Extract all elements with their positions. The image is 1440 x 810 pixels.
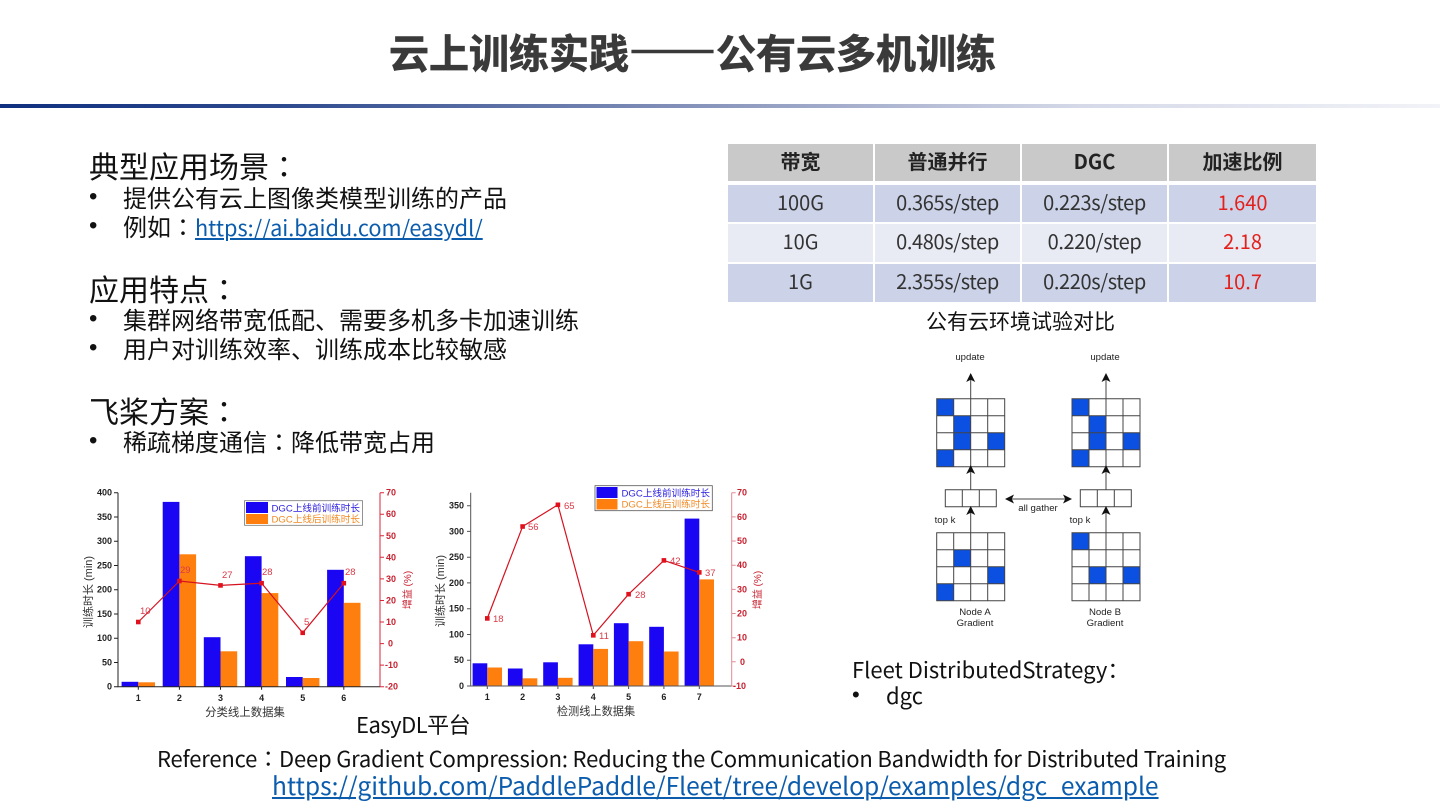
left axis labels: 250 bbox=[97, 560, 112, 570]
row 1G: 10.7 bbox=[1223, 266, 1262, 295]
gain line: 29 bbox=[180, 565, 191, 576]
right axis labels: 40 bbox=[737, 560, 747, 570]
axis titles: 增益 (%) bbox=[401, 571, 414, 609]
reference line: Reference：Deep Gradient Compression: Reducing the Communication Bandwidth for Distributed Training bbox=[157, 742, 1226, 774]
bullet: dgc: dgc bbox=[886, 679, 923, 711]
gain line: 28 bbox=[262, 567, 273, 578]
gain line: 28 bbox=[635, 590, 646, 601]
row 1G: 2.355s/step bbox=[896, 266, 999, 295]
arrows bbox=[971, 374, 1106, 533]
diagram labels: top k bbox=[1070, 515, 1091, 526]
header row bbox=[728, 144, 1316, 181]
gain line: 18 bbox=[493, 614, 504, 625]
left axis labels: 350 bbox=[97, 512, 112, 522]
chart: classification datasets bbox=[81, 488, 414, 719]
axis titles: 增益 (%) bbox=[751, 571, 764, 609]
header row: 带宽 bbox=[780, 146, 820, 174]
heading: features: 应用特点： bbox=[89, 266, 239, 310]
text block: application features: • bbox=[89, 305, 97, 332]
bullet: bandwidth: 集群网络带宽低配、需要多机多卡加速训练 bbox=[123, 301, 579, 336]
x axis labels: 4 bbox=[591, 692, 596, 702]
bars: before and after bbox=[122, 502, 360, 687]
left axis labels: 200 bbox=[449, 578, 464, 588]
axes bbox=[467, 493, 736, 689]
bars: before and after bbox=[473, 519, 714, 686]
x axis labels: 1 bbox=[136, 693, 141, 703]
axis titles: 训练时长 (min) bbox=[81, 556, 95, 628]
left axis labels: 250 bbox=[449, 552, 464, 562]
left axis labels: 350 bbox=[449, 501, 464, 511]
diagram labels: Node B bbox=[1089, 607, 1121, 618]
row 1G: 1G bbox=[788, 266, 813, 295]
left axis labels: 100 bbox=[449, 630, 464, 640]
legend bbox=[244, 501, 362, 526]
axis titles: 分类线上数据集 bbox=[205, 705, 285, 719]
legend: DGC上线前训练时长 bbox=[272, 502, 360, 514]
right axis labels: 50 bbox=[386, 531, 396, 541]
right axis labels: 50 bbox=[737, 536, 747, 546]
x axis labels: 7 bbox=[697, 692, 702, 702]
right axis labels: 20 bbox=[386, 596, 396, 606]
right axis labels: 10 bbox=[386, 617, 396, 627]
text block: application features: • bbox=[89, 334, 97, 361]
diagram labels: top k bbox=[935, 515, 956, 526]
left axis labels: 100 bbox=[97, 633, 112, 643]
chart caption: EasyDL平台 bbox=[356, 708, 470, 740]
x axis labels: 6 bbox=[661, 692, 666, 702]
row 1G: 0.220s/step bbox=[1043, 266, 1146, 295]
gain line bbox=[136, 565, 356, 635]
fleet heading: Fleet DistributedStrategy： bbox=[852, 653, 1129, 685]
row 10G: 0.220/step bbox=[1048, 226, 1141, 255]
x axis labels bbox=[485, 692, 702, 702]
gain line bbox=[485, 501, 716, 642]
text block: typical scenarios: • bbox=[89, 212, 97, 239]
left axis labels: 200 bbox=[97, 585, 112, 595]
axis titles bbox=[433, 555, 764, 718]
x axis labels: 6 bbox=[341, 693, 346, 703]
row 100G: 1.640 bbox=[1218, 186, 1267, 216]
gain line: 10 bbox=[140, 606, 151, 617]
row 10G bbox=[728, 224, 1316, 262]
right axis labels bbox=[385, 488, 398, 692]
diagram labels: update bbox=[1090, 352, 1120, 363]
node A gradient grid bbox=[937, 533, 1005, 601]
right axis labels: 0 bbox=[388, 639, 393, 649]
text block: paddle solution bbox=[89, 388, 435, 458]
right axis labels: 30 bbox=[386, 574, 396, 584]
right axis labels: -10 bbox=[733, 681, 746, 691]
bullet: product: 提供公有云上图像类模型训练的产品 bbox=[123, 179, 507, 214]
gain line: 11 bbox=[599, 631, 609, 642]
text block: application features bbox=[89, 266, 579, 365]
reference link: https://github.com/PaddlePaddle/Fleet/tree/develop/examples/dgc_example bbox=[272, 768, 1159, 803]
right axis labels: 70 bbox=[386, 488, 396, 498]
right axis labels: 60 bbox=[386, 509, 396, 519]
bullet: example link: 例如：https://ai.baidu.com/easydl/ bbox=[123, 208, 483, 243]
left axis labels: 0 bbox=[107, 682, 112, 692]
legend: DGC上线后训练时长 bbox=[622, 498, 710, 510]
diagram labels: Node A bbox=[959, 607, 991, 618]
axis titles: 检测线上数据集 bbox=[557, 704, 635, 718]
left axis labels: 50 bbox=[454, 655, 464, 665]
left axis labels: 300 bbox=[97, 536, 112, 546]
right axis labels: 10 bbox=[737, 633, 747, 643]
x axis labels: 1 bbox=[485, 692, 490, 702]
x axis labels: 3 bbox=[555, 692, 560, 702]
right axis labels: 20 bbox=[737, 608, 747, 618]
right axis labels: 0 bbox=[740, 657, 745, 667]
fleet strategy text bbox=[852, 653, 1129, 711]
right axis labels: -10 bbox=[385, 660, 398, 670]
right axis labels: 40 bbox=[386, 552, 396, 562]
axis titles: 训练时长 (min) bbox=[433, 555, 447, 627]
node A top-k vector bbox=[945, 490, 996, 507]
left axis labels: 0 bbox=[459, 681, 464, 691]
comparison table bbox=[728, 144, 1316, 302]
gain line: 42 bbox=[670, 556, 681, 567]
node A updated grid bbox=[937, 399, 1005, 467]
left axis labels bbox=[449, 501, 464, 691]
header row: 加速比例 bbox=[1202, 146, 1282, 174]
gain line: 56 bbox=[528, 522, 539, 533]
left axis labels: 400 bbox=[97, 488, 112, 498]
diagram labels bbox=[935, 352, 1124, 629]
title: 云上训练实践——公有云多机训练 bbox=[389, 18, 996, 81]
text block: typical scenarios bbox=[89, 143, 507, 243]
left axis labels bbox=[97, 488, 112, 692]
x axis labels bbox=[136, 693, 346, 703]
gain line: 5 bbox=[304, 617, 309, 628]
right axis labels bbox=[733, 488, 747, 691]
heading: solution: 飞桨方案： bbox=[89, 388, 239, 432]
diagram labels: Gradient bbox=[1087, 618, 1124, 629]
x axis labels: 4 bbox=[259, 693, 264, 703]
row 1G bbox=[728, 264, 1316, 302]
left axis labels: 150 bbox=[449, 604, 464, 614]
x axis labels: 3 bbox=[218, 693, 223, 703]
node B top-k vector bbox=[1080, 490, 1131, 507]
x axis labels: 5 bbox=[626, 692, 631, 702]
fleet strategy text: • bbox=[852, 682, 860, 707]
header row: DGC bbox=[1074, 146, 1115, 174]
row 100G bbox=[728, 185, 1316, 222]
legend bbox=[595, 486, 712, 511]
diagram labels: Gradient bbox=[957, 618, 994, 629]
gain line: 28 bbox=[345, 567, 356, 578]
table caption: 公有云环境试验对比 bbox=[926, 306, 1115, 336]
axes bbox=[114, 493, 384, 690]
bullet: dgc bbox=[852, 679, 923, 711]
x axis labels: 2 bbox=[520, 692, 525, 702]
right axis labels: 70 bbox=[737, 488, 747, 498]
chart: detection datasets bbox=[433, 485, 764, 718]
x axis labels: 2 bbox=[177, 693, 182, 703]
node B gradient grid bbox=[1072, 533, 1140, 601]
bullet: cost: 用户对训练效率、训练成本比较敏感 bbox=[123, 330, 507, 365]
x axis labels: 5 bbox=[300, 693, 305, 703]
gain line: 27 bbox=[222, 570, 233, 581]
gain line: 37 bbox=[705, 568, 716, 579]
left axis labels: 300 bbox=[449, 526, 464, 536]
bullet: sparse gradient: 稀疏梯度通信：降低带宽占用 bbox=[123, 423, 435, 458]
title gradient rule bbox=[0, 104, 1440, 108]
left axis labels: 150 bbox=[97, 609, 112, 619]
row 100G: 100G bbox=[777, 186, 824, 216]
right axis labels: 30 bbox=[737, 584, 747, 594]
right axis labels: -20 bbox=[385, 682, 398, 692]
diagram labels: update bbox=[955, 352, 985, 363]
legend: DGC上线后训练时长 bbox=[272, 514, 360, 526]
text block: typical scenarios: • bbox=[89, 183, 97, 210]
text block: paddle solution: • bbox=[89, 427, 97, 454]
diagram labels: all gather bbox=[1018, 503, 1059, 514]
axis titles bbox=[81, 556, 414, 719]
legend: DGC上线前训练时长 bbox=[622, 488, 710, 500]
row 10G: 10G bbox=[782, 226, 818, 255]
left axis labels: 50 bbox=[102, 658, 112, 668]
row 100G: 0.365s/step bbox=[896, 186, 999, 216]
node B updated grid bbox=[1072, 399, 1140, 467]
header row: 普通并行 bbox=[908, 146, 988, 174]
gain line: 65 bbox=[564, 501, 575, 512]
row 10G: 2.18 bbox=[1223, 226, 1262, 255]
heading: typical scenarios: 典型应用场景： bbox=[89, 143, 299, 187]
DGC diagram bbox=[934, 352, 1140, 629]
row 100G: 0.223s/step bbox=[1043, 186, 1146, 216]
right axis labels: 60 bbox=[737, 512, 747, 522]
row 10G: 0.480s/step bbox=[896, 226, 999, 255]
